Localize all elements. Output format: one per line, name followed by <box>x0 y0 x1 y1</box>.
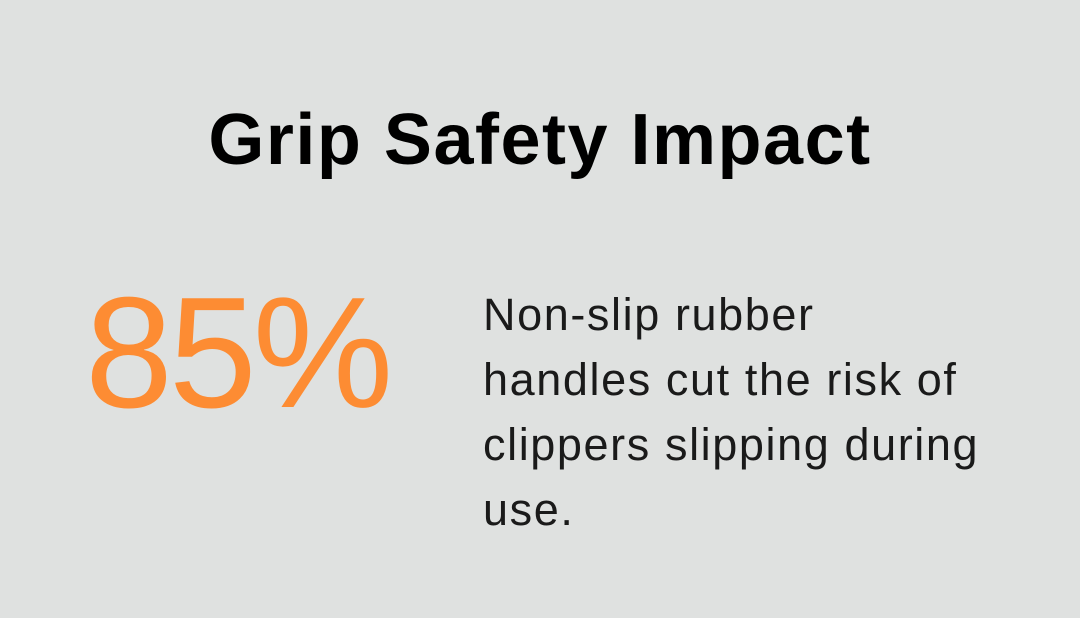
description text: Non-slip rubber <box>483 289 815 340</box>
description text: handles cut the risk of <box>483 354 958 405</box>
description text: clippers slipping during <box>483 419 979 470</box>
statistic: 85%: 85% <box>85 265 389 441</box>
description text <box>483 289 979 535</box>
title: Grip Safety Impact <box>208 100 872 180</box>
description text: use. <box>483 484 574 535</box>
